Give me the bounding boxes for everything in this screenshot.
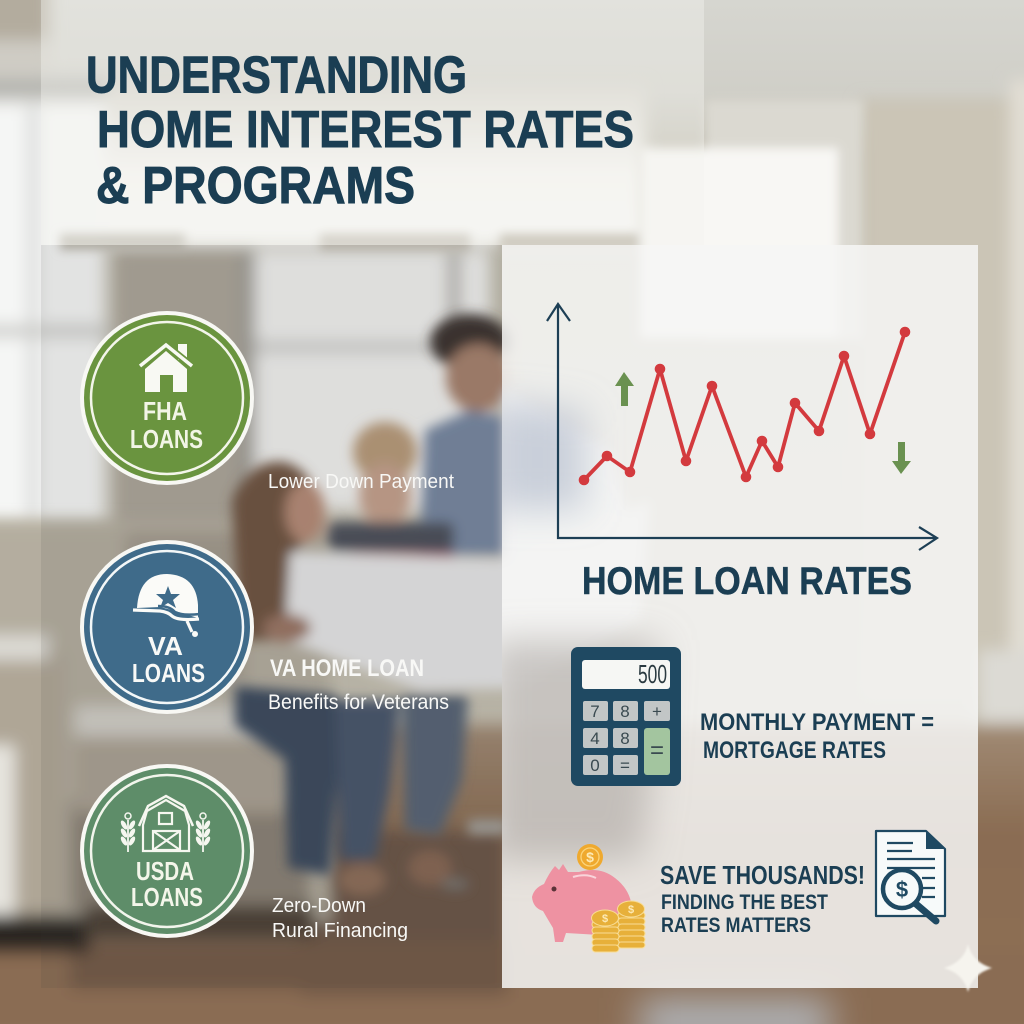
text: monthly payment equals mortgage rates: MONTHLY PAYMENT = (700, 709, 934, 736)
caption: lower down payment: Lower Down Payment (268, 470, 454, 493)
icon: piggy bank with coins: $ (586, 849, 594, 865)
icon: piggy bank with coins: $ (628, 904, 634, 916)
badge: VA loans (80, 540, 254, 714)
caption: VA home loan benefits: Benefits for Veterans (268, 691, 449, 714)
title (86, 46, 634, 215)
icon: calculator: 4 (590, 729, 600, 748)
text: monthly payment equals mortgage rates (700, 709, 934, 764)
caption: zero-down rural financing: Rural Financing (272, 919, 408, 942)
icon: helmet with star (133, 574, 200, 637)
icon: calculator: + (652, 702, 662, 721)
title: HOME INTEREST RATES (97, 101, 634, 159)
chart: home loan rates line (547, 304, 937, 550)
panel: title backing (41, 0, 704, 245)
caption: zero-down rural financing: Zero-Down (272, 894, 366, 917)
icon: barn and wheat (120, 796, 211, 852)
label: USDA LOANS: USDA (136, 856, 194, 886)
text: save thousands (660, 860, 865, 937)
panel: rates and savings (490, 245, 978, 988)
chart axes (547, 304, 937, 550)
icon: calculator: = (620, 756, 630, 775)
label: FHA LOANS (130, 396, 203, 454)
icon: calculator: 8 (620, 729, 630, 748)
icon: house (140, 344, 192, 392)
icon: calculator: 0 (590, 756, 600, 775)
label: USDA LOANS: LOANS (131, 882, 203, 912)
label: FHA LOANS: LOANS (130, 424, 203, 454)
icon: document with magnifier (876, 831, 945, 921)
label: USDA LOANS (131, 856, 203, 912)
icon: piggy bank with coins (532, 844, 645, 952)
icon: sparkle (944, 944, 992, 992)
icon: piggy bank with coins: $ (602, 913, 608, 925)
caption: VA home loan benefits: VA HOME LOAN (270, 655, 424, 682)
title: & PROGRAMS (96, 157, 415, 215)
badge: USDA loans (80, 764, 254, 938)
icon: calculator: = (650, 737, 664, 764)
icon: calculator (571, 647, 681, 786)
text: save thousands: RATES MATTERS (661, 914, 811, 937)
caption: zero-down rural financing (272, 894, 408, 942)
text: save thousands: FINDING THE BEST (661, 891, 828, 914)
right window (60, 100, 863, 340)
title: UNDERSTANDING (86, 46, 467, 104)
badge: FHA loans (80, 311, 254, 485)
icon: document with magnifier: $ (896, 877, 908, 902)
caption: VA home loan benefits (268, 655, 449, 714)
arrow: rates up (615, 372, 634, 406)
arrow: rates down (892, 442, 911, 474)
icon: calculator: 7 (590, 702, 600, 721)
label: FHA LOANS: FHA (143, 396, 187, 426)
text: monthly payment equals mortgage rates: MORTGAGE RATES (703, 737, 886, 764)
text: save thousands: SAVE THOUSANDS! (660, 860, 865, 890)
panel: loan programs (41, 245, 502, 988)
label: VA LOANS: VA (148, 631, 183, 661)
rate line (579, 327, 910, 485)
icon: calculator: 500 (638, 659, 667, 689)
chart title: HOME LOAN RATES (582, 560, 912, 603)
label: VA LOANS: LOANS (132, 658, 205, 688)
floor reflection (640, 998, 830, 1024)
icon: calculator: 8 (620, 702, 630, 721)
label: VA LOANS (132, 631, 205, 688)
